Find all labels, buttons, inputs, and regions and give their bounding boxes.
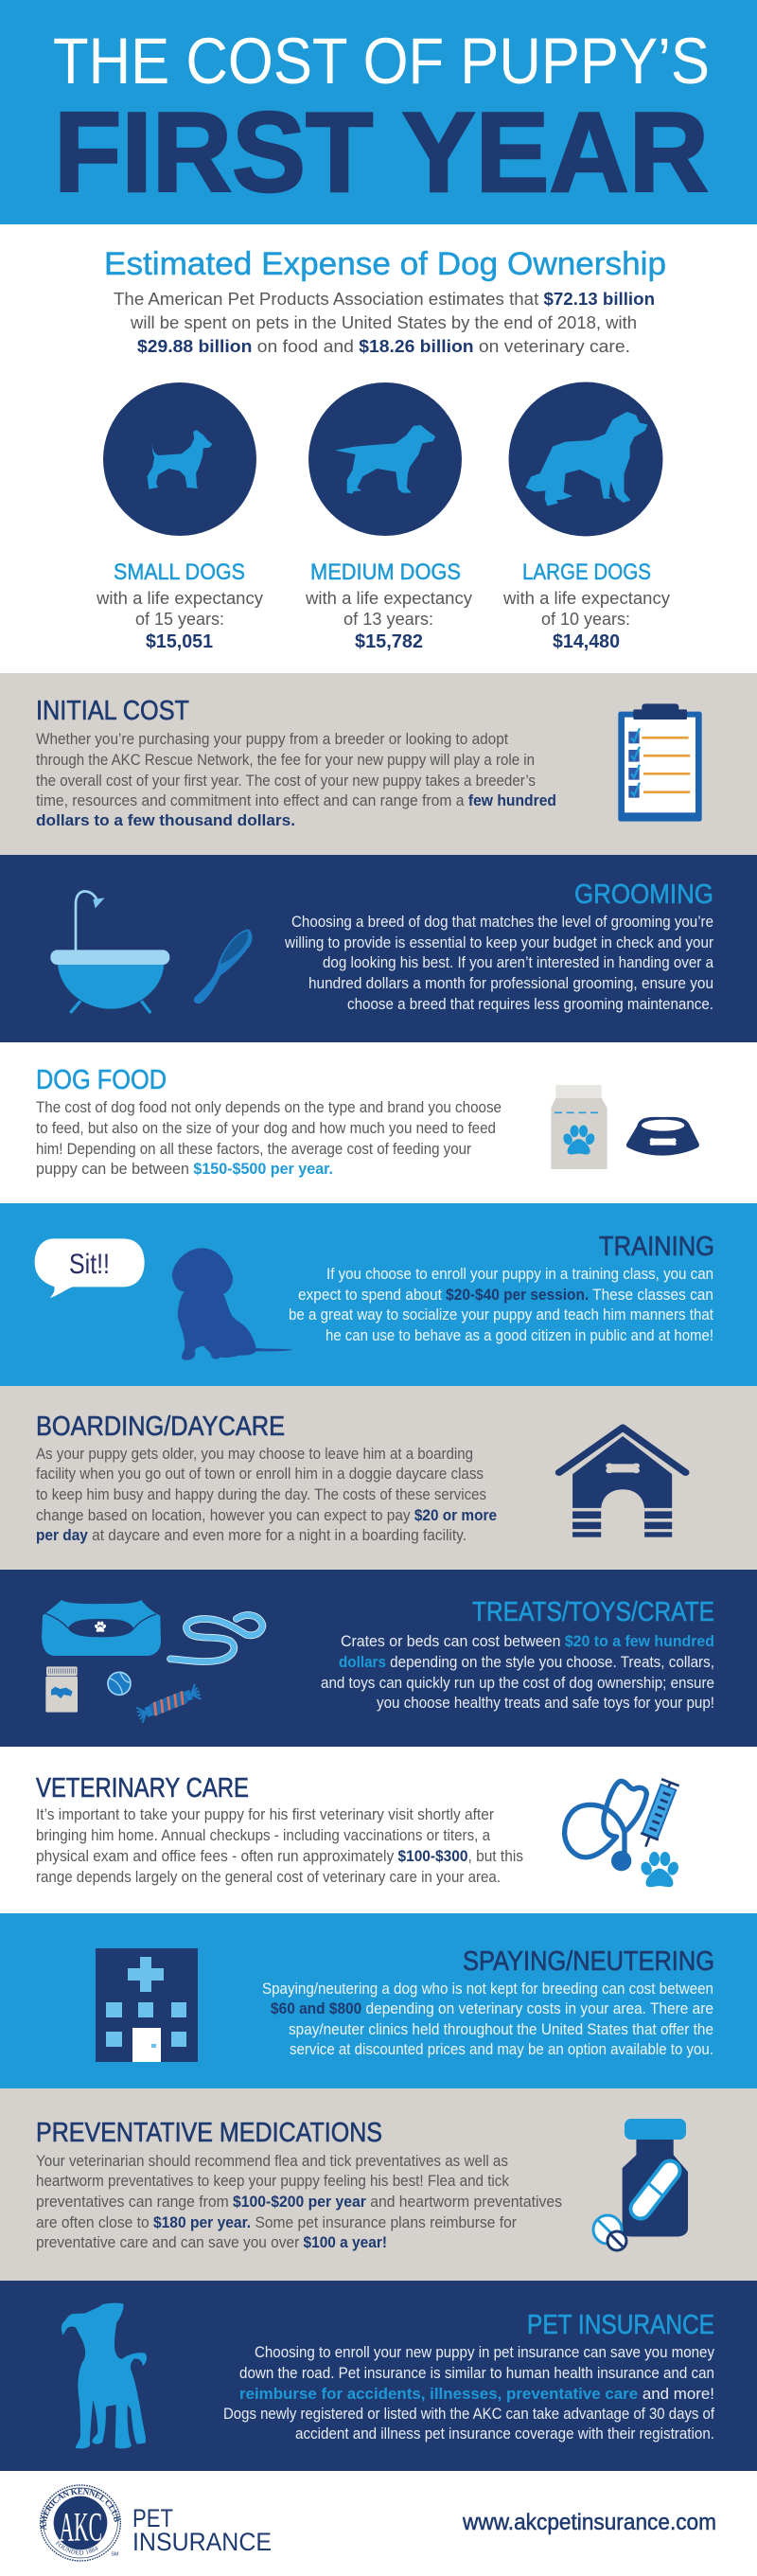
text block: grooming: hundred dollars a month for professional grooming, ensure you (308, 974, 713, 992)
text block: veterinary care: It’s important to take your puppy for his first veterinary visit shortly after (36, 1805, 494, 1823)
text block: spaying: spay/neuter clinics held throughout the United States that offer the (289, 2020, 713, 2038)
text block: grooming (284, 913, 713, 1013)
intro text block: The American Pet Products Association estimates that $72.13 billion (114, 290, 655, 309)
label: large dogs: LARGE DOGS (522, 560, 651, 585)
panel: footer (40, 2484, 716, 2562)
text block: preventative medications: are often close to $180 per year. Some pet insurance plans reimburse for (36, 2213, 517, 2231)
text block: pet insurance (223, 2343, 714, 2443)
icon: rope toy (135, 1683, 202, 1723)
panel: spaying/neutering (0, 1913, 757, 2088)
heading: grooming: GROOMING (574, 879, 713, 910)
text block: training: expect to spend about $20-$40 per session. These classes can (298, 1286, 713, 1304)
text block: pet insurance: reimburse for accidents, illnesses, preventative care and more! (239, 2385, 714, 2403)
label: small dogs: SMALL DOGS (114, 560, 245, 585)
text block: preventative medications: preventatives can range from $100-$200 per year and heartworm preventatives (36, 2193, 562, 2211)
icon: small dog circle (103, 382, 256, 536)
logo text: pet insurance: PET (132, 2504, 173, 2532)
text block: veterinary care (36, 1805, 523, 1886)
icon: treat jar (45, 1666, 78, 1713)
icon: syringe (637, 1779, 679, 1850)
heading: spaying/neutering: SPAYING/NEUTERING (463, 1946, 714, 1977)
text: medium dogs life expectancy: with a life expectancy (305, 589, 472, 608)
heading: estimated expense: Estimated Expense of Dog Ownership (104, 246, 666, 282)
text block: training: If you choose to enroll your puppy in a training class, you can (326, 1265, 713, 1283)
text: large dogs life expectancy: of 10 years: (541, 610, 630, 629)
callout: speech bubble (35, 1238, 145, 1298)
number: medium dogs cost: $15,782 (355, 631, 423, 652)
text block: pet insurance: Choosing to enroll your new puppy in pet insurance can save you money (255, 2343, 714, 2361)
large dogs column (502, 382, 670, 652)
logo text: pet insurance: INSURANCE (132, 2528, 272, 2556)
icon: hospital building (96, 1948, 198, 2062)
text block: boarding: As your puppy gets older, you may choose to leave him at a boarding (36, 1445, 473, 1463)
text: large dogs life expectancy: with a life expectancy (502, 589, 670, 608)
text block: grooming: willing to provide is essential to keep your budget in check and your (284, 933, 713, 951)
panel: preventative medications (0, 2088, 757, 2281)
intro text block: will be spent on pets in the United States by the end of 2018, with (130, 313, 637, 332)
text block: initial cost: Whether you’re purchasing your puppy from a breeder or looking to adopt (36, 730, 508, 748)
text block: preventative medications: heartworm preventatives to keep your puppy feeling his best! Flea and tick (36, 2172, 509, 2190)
medium dogs column (305, 382, 472, 652)
title line: first year: FIRST YEAR (54, 89, 709, 216)
text block: veterinary care: bringing him home. Annual checkups - including vaccinations or titers, a (36, 1826, 490, 1844)
icon: standing puppy (62, 2303, 147, 2448)
icon: dog house (559, 1428, 685, 1537)
text block: training: he can use to behave as a good citizen in public and at home! (326, 1326, 713, 1344)
icon: paw (640, 1852, 680, 1887)
number: large dogs cost: $14,480 (553, 631, 620, 652)
text block: preventative medications: Your veterinarian should recommend flea and tick preventatives as well as (36, 2152, 508, 2170)
icon: sitting puppy (172, 1248, 292, 1360)
icon: dog bowl (626, 1117, 699, 1156)
icon: medium dog circle (308, 382, 462, 536)
panel: grooming (0, 855, 757, 1042)
intro text block (114, 290, 655, 356)
text block: initial cost: the overall cost of your first year. The cost of your new puppy takes a breeder’s (36, 772, 536, 790)
heading: dog food: DOG FOOD (36, 1065, 167, 1095)
panel: veterinary care (36, 1773, 680, 1887)
number: small dogs cost: $15,051 (146, 631, 213, 652)
logo: AKC seal: FOUNDED 1884 (55, 2541, 98, 2554)
text: small dogs life expectancy (96, 589, 263, 629)
text block: boarding: to keep him busy and happy during the day. The costs of these services (36, 1485, 486, 1503)
text block: treats: and toys can quickly run up the cost of dog ownership; ensure (321, 1674, 714, 1692)
icon: clipboard checklist (618, 703, 702, 822)
text block: boarding (36, 1445, 497, 1544)
heading: initial cost: INITIAL COST (36, 696, 189, 726)
panel: initial cost (0, 673, 757, 855)
heading: preventative medications: PREVENTATIVE MEDICATIONS (36, 2118, 382, 2148)
heading: boarding/daycare: BOARDING/DAYCARE (36, 1412, 285, 1442)
icon: dog food bag (551, 1085, 607, 1169)
heading: veterinary care: VETERINARY CARE (36, 1773, 249, 1803)
logo: AKC seal: AMERICAN KENNEL CLUB (41, 2488, 119, 2530)
text: medium dogs life expectancy: of 13 years: (343, 610, 433, 629)
icon: ball (108, 1672, 131, 1695)
text: medium dogs life expectancy (305, 589, 472, 629)
text block: grooming: dog looking his best. If you aren’t interested in handing over a (323, 953, 713, 971)
text block: treats: Crates or beds can cost between $20 to a few hundred (341, 1632, 714, 1650)
text block: spaying: Spaying/neutering a dog who is not kept for breeding can cost between (262, 1980, 713, 1998)
icon: stethoscope (565, 1781, 646, 1871)
text block: dog food: him! Depending on all these factors, the average cost of feeding your (36, 1140, 471, 1158)
small dogs column (96, 382, 263, 652)
heading: training: TRAINING (599, 1232, 714, 1262)
intro text block: $29.88 billion on food and $18.26 billion on veterinary care. (137, 337, 630, 356)
text block: dog food: puppy can be between $150-$500 per year. (36, 1160, 333, 1178)
text block: training (289, 1265, 713, 1344)
text block: veterinary care: physical exam and office fees - often run approximately $100-$300, but this (36, 1847, 523, 1865)
text block: veterinary care: range depends largely on the general cost of veterinary care in your area. (36, 1868, 501, 1886)
website url: www.akcpetinsurance.com (462, 2510, 716, 2535)
icon: brush (194, 929, 252, 1004)
text block: spaying (262, 1980, 713, 2058)
heading: treats/toys/crate: TREATS/TOYS/CRATE (472, 1597, 714, 1627)
text: large dogs life expectancy (502, 589, 670, 629)
logo text: pet insurance (132, 2504, 272, 2556)
text block: grooming: Choosing a breed of dog that matches the level of grooming you’re (291, 913, 713, 931)
icon: leash (170, 1615, 262, 1661)
text block: boarding: change based on location, however you can expect to pay $20 or more (36, 1506, 497, 1524)
icon: pill bottle (593, 2119, 688, 2250)
panel: boarding/daycare (0, 1386, 757, 1570)
text block: training: be a great way to socialize your puppy and teach him manners that (289, 1306, 713, 1324)
text block: dog food: to feed, but also on the size of your dog and how much you need to feed (36, 1119, 496, 1137)
text block: pet insurance: accident and illness pet insurance coverage with their registration. (295, 2425, 714, 2443)
heading: pet insurance: PET INSURANCE (527, 2310, 714, 2340)
text block: grooming: choose a breed that requires less grooming maintenance. (347, 995, 713, 1013)
text block: treats (321, 1632, 714, 1712)
panel: estimated expense of dog ownership (96, 246, 670, 652)
text block: preventative medications (36, 2152, 562, 2251)
text block: initial cost: dollars to a few thousand dollars. (36, 811, 295, 829)
text block: initial cost (36, 730, 556, 829)
text block: treats: dollars depending on the style you choose. Treats, collars, (339, 1653, 714, 1671)
text block: dog food (36, 1098, 502, 1178)
logo: AKC seal: AKC (60, 2504, 102, 2549)
callout: speech bubble: Sit!! (69, 1249, 110, 1280)
text block: initial cost: through the AKC Rescue Network, the fee for your new puppy will play a role in (36, 751, 535, 769)
text block: spaying: $60 and $800 depending on veterinary costs in your area. There are (271, 1999, 713, 2017)
panel: training (0, 1203, 757, 1386)
icon: bathtub with shower (50, 892, 169, 1013)
label: medium dogs: MEDIUM DOGS (310, 560, 461, 585)
text: small dogs life expectancy: of 15 years: (135, 610, 224, 629)
panel: treats/toys/crate (0, 1570, 757, 1747)
text block: initial cost: time, resources and commitment into effect and can range from a few hundred (36, 791, 556, 809)
panel: pet insurance (0, 2281, 757, 2471)
text: small dogs life expectancy: with a life expectancy (96, 589, 263, 608)
icon: dog bed (42, 1600, 161, 1656)
logo: AKC seal (40, 2484, 121, 2562)
text block: dog food: The cost of dog food not only depends on the type and brand you choose (36, 1098, 502, 1116)
text block: spaying: service at discounted prices and may be an option available to you. (290, 2040, 713, 2058)
text block: preventative medications: preventative care and can save you over $100 a year! (36, 2233, 387, 2251)
text block: boarding: facility when you go out of town or enroll him in a doggie daycare class (36, 1465, 484, 1483)
text block: treats: you choose healthy treats and safe toys for your pup! (377, 1694, 714, 1712)
panel: title header (0, 0, 757, 224)
text block: pet insurance: down the road. Pet insurance is similar to human health insurance and can (239, 2364, 714, 2382)
logo: AKC seal: SM (111, 2552, 118, 2558)
panel: dog food (36, 1065, 699, 1178)
icon: large dog circle (509, 382, 662, 536)
text block: boarding: per day at daycare and even more for a night in a boarding facility. (36, 1526, 467, 1544)
